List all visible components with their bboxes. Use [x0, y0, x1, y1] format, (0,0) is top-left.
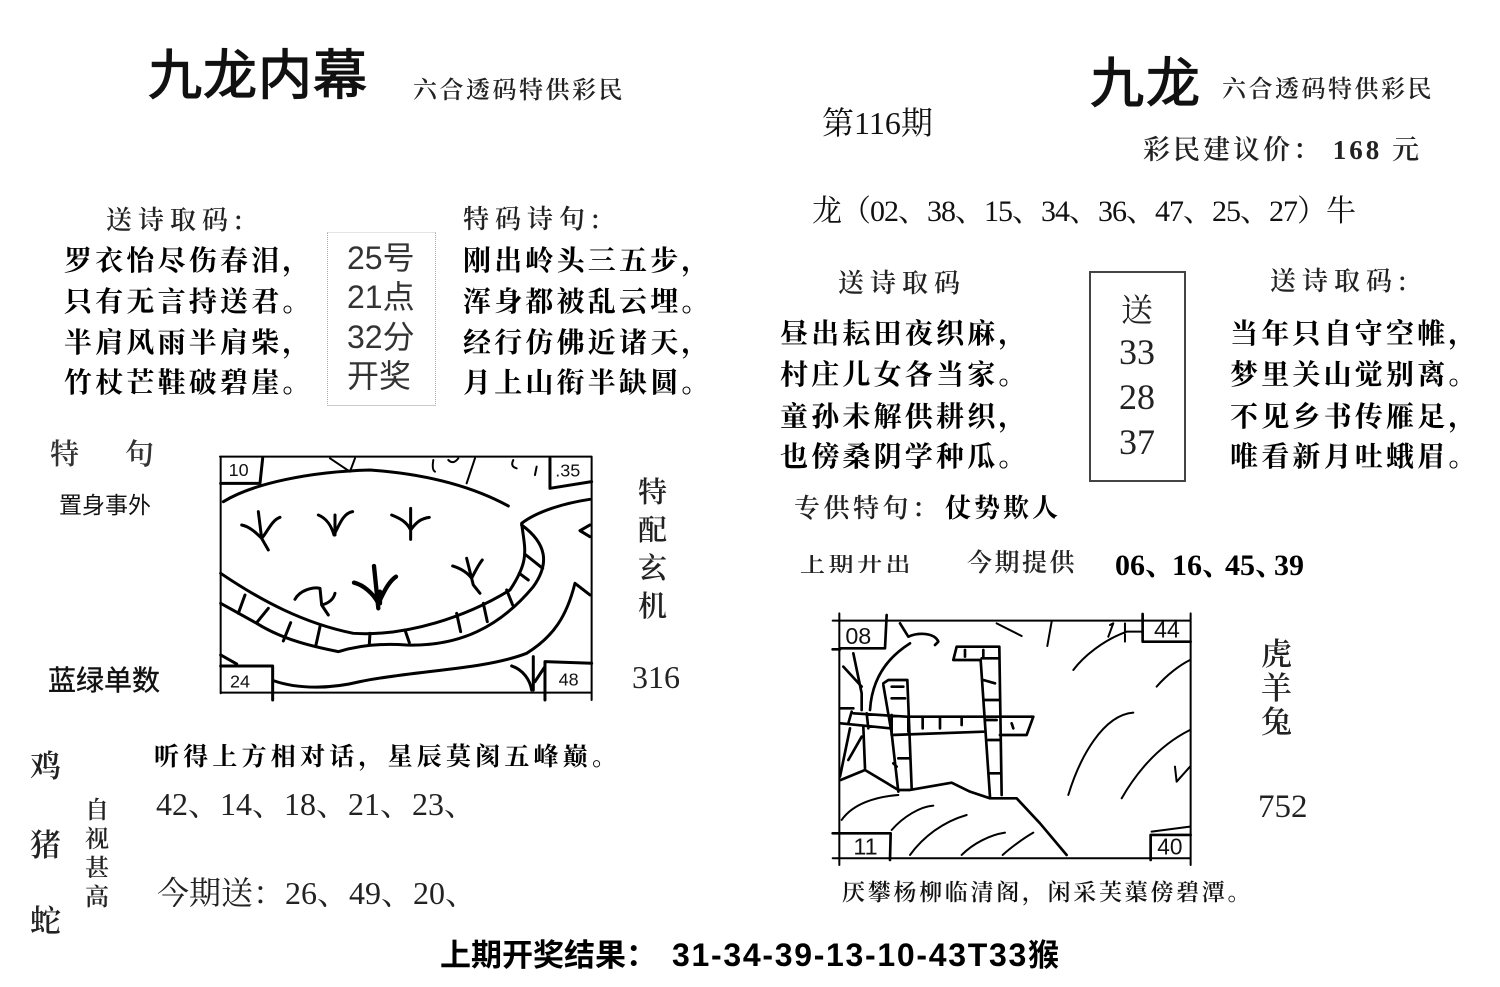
panel: draw time box — [327, 232, 436, 406]
sketch: right bridge illustration: 11 — [853, 834, 878, 860]
panel: draw time box: 32分 — [347, 319, 415, 355]
sketch: left field illustration: 10 — [229, 460, 249, 480]
panel: gift number box: 33 — [1119, 332, 1155, 372]
panel: gift number box: 送 — [1121, 285, 1153, 331]
zodiac number line: 龙（02、38、15、34、36、47、25、27）牛 — [812, 195, 1355, 228]
title: right masthead: 九龙 — [1090, 39, 1202, 118]
panel: right poem heading A: 送诗取码 — [838, 263, 966, 300]
this issue numbers: 06、16、45、39 — [1115, 549, 1304, 582]
left column: zodiac animals — [30, 741, 61, 941]
special phrase right: 专供特句： — [794, 488, 942, 525]
label: special match column: 特配玄机 — [638, 470, 667, 625]
label: special phrase heading: 特句 — [50, 432, 200, 473]
panel: left poem: 只有无言持送君。 — [64, 287, 314, 318]
panel: draw time box: 开奖 — [347, 358, 411, 394]
panel: left poem heading: 送诗取码: — [106, 200, 249, 237]
panel: right poem A — [780, 319, 1030, 473]
subtitle: left: 六合透码特供彩民 — [413, 70, 625, 105]
panel: left poem: 半肩风雨半肩柴， — [64, 328, 314, 359]
panel: right poem A: 童孙未解供耕织， — [780, 402, 1030, 433]
sketch: right bridge illustration: 44 — [1154, 616, 1180, 642]
panel: gift number box — [1089, 271, 1186, 482]
left column: zodiac animals: 猪 — [30, 820, 61, 865]
panel: right poem A: 昼出耘田夜织麻， — [780, 319, 1030, 350]
sketch: left field illustration: 24 — [230, 671, 250, 691]
left column: idiom: 自视甚高 — [85, 790, 109, 912]
panel: right poem B: 当年只自守空帷， — [1230, 319, 1480, 350]
panel: special poem: 刚出岭头三五步， — [463, 246, 713, 277]
label: blue green odd: 蓝绿单数 — [48, 665, 160, 696]
last and this issue: 上期开出 — [800, 544, 914, 580]
panel: special poem: 经行仿佛近诸天， — [463, 328, 713, 359]
panel: draw time box: 21点 — [347, 279, 415, 315]
suggested price: 彩民建议价： 168 元 — [1143, 135, 1422, 165]
special phrase right — [794, 488, 1061, 525]
panel: right poem A: 村庄儿女各当家。 — [780, 360, 1030, 391]
panel: special poem: 月上山衔半缺圆。 — [463, 368, 713, 399]
left column: zodiac animals: 蛇 — [30, 896, 61, 941]
subtitle: right: 六合透码特供彩民 — [1222, 69, 1434, 104]
label: special match column — [632, 470, 680, 695]
panel: right poem B: 梦里关山觉别离。 — [1230, 360, 1480, 391]
right column: number: 752 — [1258, 789, 1308, 825]
panel: gift number box: 37 — [1119, 422, 1155, 462]
footer: last issue result: 上期开奖结果： 31-34-39-13-10-43T33猴 — [440, 937, 1059, 973]
panel: special poem: 浑身都被乱云埋。 — [463, 287, 713, 318]
numbers: this issue gift: 今期送：26、49、20、 — [157, 875, 477, 911]
panel: special poem — [463, 246, 713, 399]
poem line right bottom: 厌攀杨柳临清阁，闲采芙蕖傍碧潭。 — [842, 874, 1253, 907]
panel: right poem B — [1230, 318, 1480, 473]
this issue numbers: 今期提供 — [967, 543, 1077, 579]
numbers: left bottom: 42、14、18、21、23、 — [156, 786, 476, 822]
panel: right poem A: 也傍桑阴学种瓜。 — [780, 442, 1030, 473]
sketch: left field illustration: .35 — [555, 461, 580, 481]
label: special phrase: 置身事外 — [59, 492, 151, 518]
left column: zodiac animals: 鸡 — [30, 741, 61, 786]
panel: draw time box: 25号 — [347, 240, 415, 276]
panel: gift number box: 28 — [1119, 377, 1155, 417]
special phrase right: 仗势欺人 — [945, 488, 1061, 525]
panel: left poem — [64, 246, 314, 399]
panel: left poem: 罗衣怡尽伤春泪， — [64, 246, 314, 277]
sketch: left field illustration: 48 — [559, 670, 579, 690]
sketch: right bridge illustration: 40 — [1157, 834, 1183, 860]
panel: left poem: 竹杖芒鞋破碧崖。 — [64, 368, 314, 399]
poem line left bottom: 听得上方相对话，星辰莫阂五峰巅。 — [154, 737, 621, 773]
issue number: 第116期 — [822, 105, 933, 141]
right column: zodiac animals: 虎羊兔 — [1261, 629, 1292, 742]
panel: right poem B: 不见乡书传雁足， — [1230, 402, 1480, 433]
label: special match column: 316 — [632, 659, 680, 695]
sketch: right bridge illustration: 08 — [845, 623, 871, 649]
title: left masthead: 九龙内幕 — [148, 31, 368, 110]
panel: right poem B: 唯看新月吐蛾眉。 — [1230, 442, 1480, 473]
panel: right poem heading B: 送诗取码: — [1270, 261, 1413, 298]
panel: special poem heading: 特码诗句: — [463, 199, 606, 236]
this issue numbers — [967, 543, 1304, 582]
